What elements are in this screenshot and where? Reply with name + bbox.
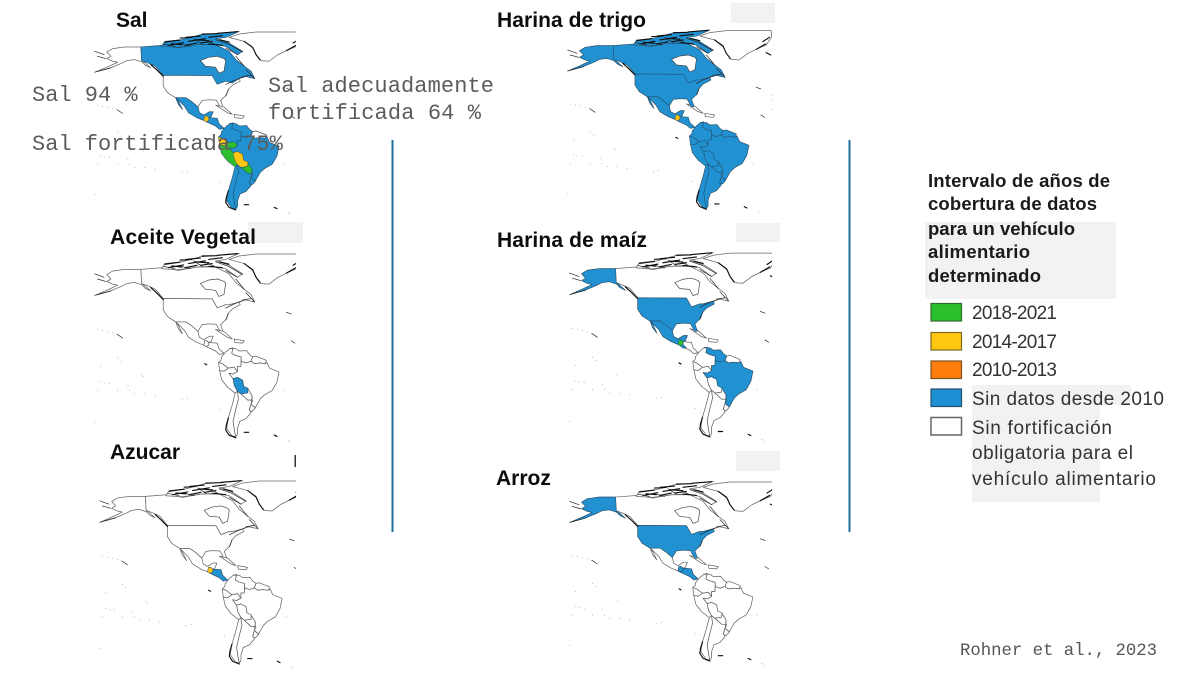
legend item Sin datos desde 2010: Sin datos desde 2010 [972, 389, 1164, 410]
legend title [928, 170, 1110, 286]
heading: Harina de trigo: Harina de trigo [497, 9, 646, 32]
heading: Harina de maíz: Harina de maíz [497, 229, 647, 252]
legend title: alimentario [928, 241, 1030, 262]
heading: Aceite Vegetal: Aceite Vegetal [110, 226, 256, 249]
heading: Azucar: Azucar [110, 441, 180, 464]
annotation: Sal 94 %: Sal 94 % [32, 83, 138, 108]
annotation: Sal fortificada 75%: Sal fortificada 75% [32, 132, 284, 157]
legend item 2010-2013: 2010-2013 [972, 360, 1057, 381]
legend title: Intervalo de años de [928, 170, 1110, 191]
column divider left [392, 140, 394, 532]
annotation: Sal adecuadamente fortificada 64 %: Sal adecuadamente [268, 74, 494, 99]
legend item 2014-2017: 2014-2017 [972, 332, 1057, 353]
map: Sal [95, 31, 302, 214]
legend title: cobertura de datos [928, 193, 1097, 214]
column divider right [848, 140, 850, 532]
legend [928, 170, 1164, 490]
heading: Sal: Sal [116, 9, 148, 32]
legend title: determinado [928, 265, 1041, 286]
legend item 2014-2017 [931, 332, 1057, 353]
source citation: Rohner et al., 2023 [960, 642, 1157, 661]
legend item 2018-2021: 2018-2021 [972, 303, 1057, 324]
background panels [248, 3, 1131, 502]
legend item Sin fortificación obligatoria [931, 418, 1156, 490]
legend item Sin fortificación obligatoria: Sin fortificación [972, 418, 1112, 439]
map: Aceite Vegetal [95, 253, 302, 442]
legend item Sin fortificación obligatoria: vehículo alimentario [972, 469, 1156, 490]
map: Arroz [570, 481, 776, 665]
map: Harina de maíz [570, 252, 776, 441]
legend item 2010-2013 [931, 360, 1057, 381]
annotation: Sal adecuadamente fortificada 64 %: fortificada 64 % [268, 101, 482, 126]
heading: Arroz: Arroz [496, 467, 551, 490]
legend item 2018-2021 [931, 303, 1057, 324]
legend item Sin fortificación obligatoria: obligatoria para el [972, 443, 1133, 464]
map: Harina de trigo [568, 30, 772, 213]
map: Azucar [100, 480, 305, 668]
edge mark beside Azucar map [294, 455, 296, 467]
annotation: Sal adecuadamente fortificada 64 % [268, 74, 494, 126]
legend title: para un vehículo [928, 218, 1075, 239]
